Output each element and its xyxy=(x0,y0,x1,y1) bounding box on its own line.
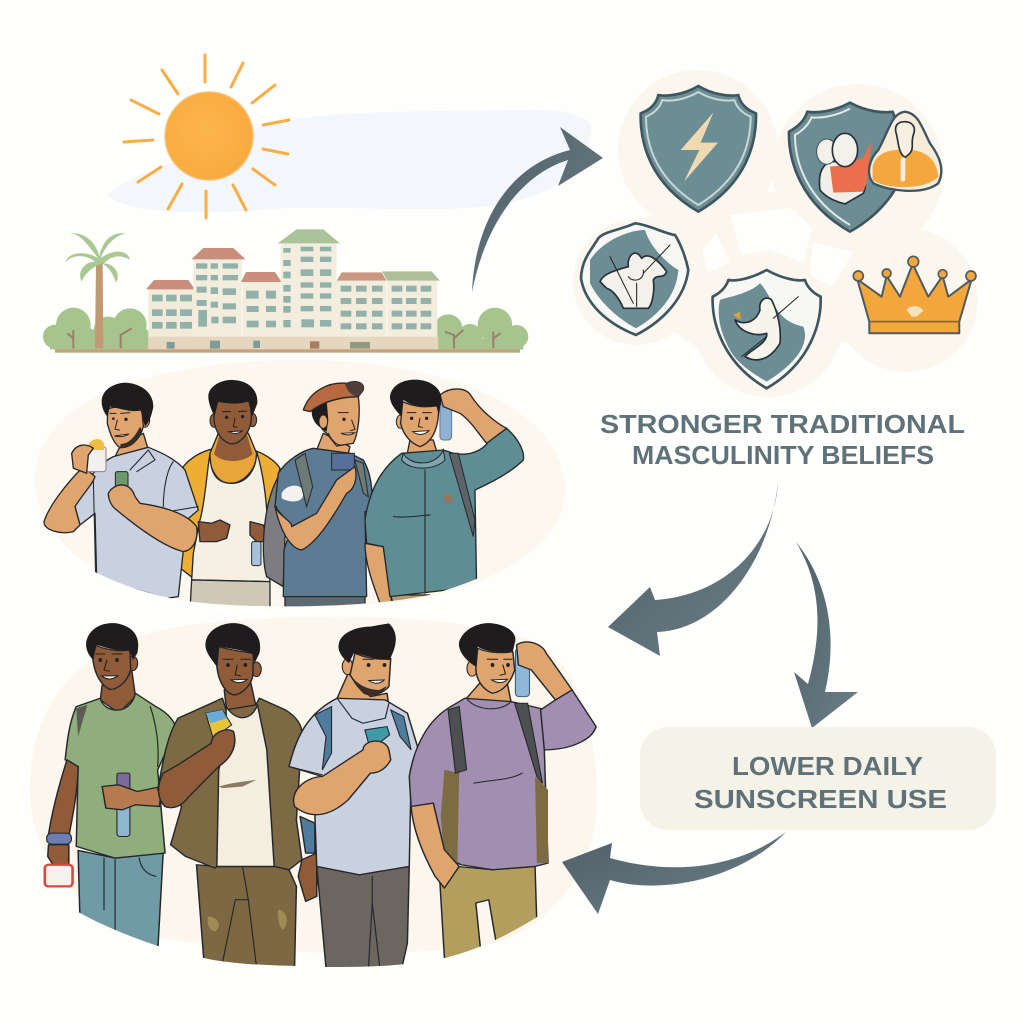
heading: stronger traditional masculinity beliefs: MASCULINITY BELIEFS xyxy=(632,440,934,470)
arrow: sunscreen use to lower group xyxy=(562,832,786,914)
panel: lower group backdrop xyxy=(30,617,597,953)
arrow: beliefs to sunscreen use xyxy=(794,542,858,728)
heading: stronger traditional masculinity beliefs: STRONGER TRADITIONAL xyxy=(600,409,965,439)
man 3: polo shirt and blue backpack xyxy=(289,623,418,968)
man 1: polo shirt holding sunscreen xyxy=(44,383,198,598)
icon: shield with group of people and padlock figure xyxy=(789,103,941,232)
man 2: dark tank top and yellow vest xyxy=(178,380,280,610)
upper group of four men xyxy=(44,380,524,610)
callout: lower daily sunscreen use xyxy=(640,727,996,830)
icon: shield with figures, left xyxy=(581,223,688,335)
icon: sun xyxy=(124,55,289,218)
heading: stronger traditional masculinity beliefs xyxy=(600,409,965,470)
icon: shield with lightning bolt xyxy=(641,86,756,212)
icons: belief shields and crown xyxy=(581,86,976,388)
sky haze xyxy=(108,110,591,212)
callout: lower daily sunscreen use: LOWER DAILY xyxy=(732,751,923,781)
icon: gold crown xyxy=(853,256,976,333)
icon: shield with archer figure, centre xyxy=(713,270,821,388)
palm tree xyxy=(65,233,130,348)
callout: lower daily sunscreen use: SUNSCREEN USE xyxy=(694,784,947,814)
panel: upper group backdrop xyxy=(35,360,565,607)
man 4: purple shirt holding sunscreen to head xyxy=(409,623,596,958)
ground xyxy=(55,349,520,353)
trees right xyxy=(430,308,528,349)
panel: icon cluster backdrop xyxy=(573,70,978,397)
man 1: green t-shirt with bottle xyxy=(45,623,176,953)
trees left xyxy=(43,308,152,349)
man 4: teal shirt holding sunscreen to head xyxy=(365,380,524,610)
city scene with palm, trees and buildings xyxy=(43,229,528,353)
arrow: beliefs to lower group xyxy=(608,482,778,656)
man 3: cap and blue vest with backpack xyxy=(263,382,373,610)
building windows xyxy=(152,247,431,349)
lower group of four men xyxy=(45,623,596,968)
arrow: city to beliefs xyxy=(472,127,603,292)
man 2: brown jacket with sunscreen xyxy=(158,623,317,968)
buildings xyxy=(146,229,440,349)
